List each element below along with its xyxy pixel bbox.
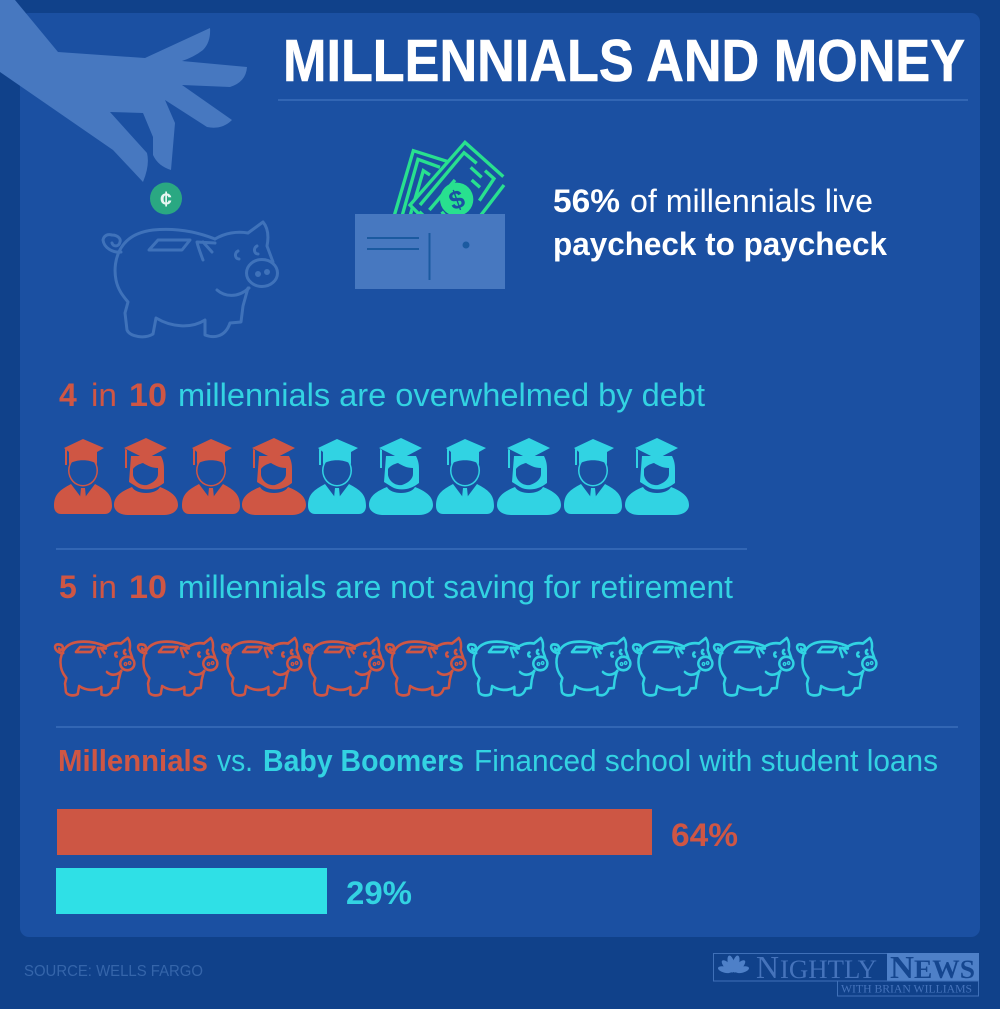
value: 29%: 29% bbox=[346, 875, 412, 911]
heading: millennials vs baby boomers: Financed school with student loans bbox=[474, 743, 938, 778]
callout: paycheck to paycheck bbox=[553, 183, 887, 262]
logo: NBC Nightly News bbox=[714, 949, 979, 996]
front banknote bbox=[410, 142, 503, 225]
logo: NBC Nightly News: N bbox=[756, 949, 779, 985]
heading: not saving for retirement: 5 bbox=[59, 569, 77, 605]
icon: wallet with cash bbox=[355, 142, 505, 289]
icon: coin: ¢ bbox=[160, 188, 172, 211]
heading: millennials vs baby boomers: Baby Boomers bbox=[263, 743, 464, 778]
callout: paycheck to paycheck: paycheck to paycheck bbox=[553, 226, 887, 262]
pictogram: 5 of 10 piggy banks bbox=[55, 638, 876, 695]
logo: NBC Nightly News: N bbox=[890, 949, 914, 985]
banknotes: $ bbox=[445, 183, 469, 216]
icon: hand dropping coin bbox=[0, 0, 247, 182]
peacock mark bbox=[717, 955, 750, 974]
logo: NBC Nightly News: IGHTLY bbox=[780, 955, 877, 984]
heading: millennials vs baby boomers: Millennials bbox=[58, 743, 208, 778]
wallet body bbox=[355, 214, 505, 289]
heading: millennials vs baby boomers: vs. bbox=[217, 743, 253, 778]
icon: large piggy bank bbox=[103, 222, 278, 337]
pictogram: 4 of 10 graduates bbox=[54, 438, 689, 515]
heading: millennials vs baby boomers bbox=[58, 743, 938, 778]
cyan piggy banks bbox=[468, 638, 876, 695]
heading: overwhelmed by debt: 4 bbox=[59, 377, 77, 413]
heading: not saving for retirement: in bbox=[91, 569, 117, 605]
value: 64%: 64% bbox=[671, 817, 738, 853]
bar: millennials bbox=[57, 809, 652, 855]
logo: NBC Nightly News: WITH BRIAN WILLIAMS bbox=[841, 984, 972, 996]
bar chart bbox=[56, 809, 738, 914]
heading: not saving for retirement: 10 bbox=[129, 569, 167, 605]
back banknote bbox=[392, 151, 453, 223]
icon: coin bbox=[150, 182, 182, 214]
logo: NBC Nightly News: EWS bbox=[914, 955, 975, 984]
callout: paycheck to paycheck: of millennials live bbox=[630, 183, 873, 219]
bar: baby boomers bbox=[56, 868, 327, 914]
heading: overwhelmed by debt: millennials are overwhelmed by debt bbox=[178, 377, 705, 413]
heading: overwhelmed by debt: in bbox=[91, 377, 117, 413]
heading: not saving for retirement: millennials are not saving for retirement bbox=[178, 569, 733, 605]
source: SOURCE: WELLS FARGO bbox=[24, 963, 203, 980]
red piggy banks bbox=[55, 638, 465, 695]
banknotes bbox=[392, 142, 504, 225]
red graduates bbox=[54, 438, 306, 515]
cyan graduates bbox=[308, 438, 689, 515]
heading: overwhelmed by debt: 10 bbox=[129, 377, 167, 413]
callout: paycheck to paycheck: 56% bbox=[553, 183, 620, 219]
